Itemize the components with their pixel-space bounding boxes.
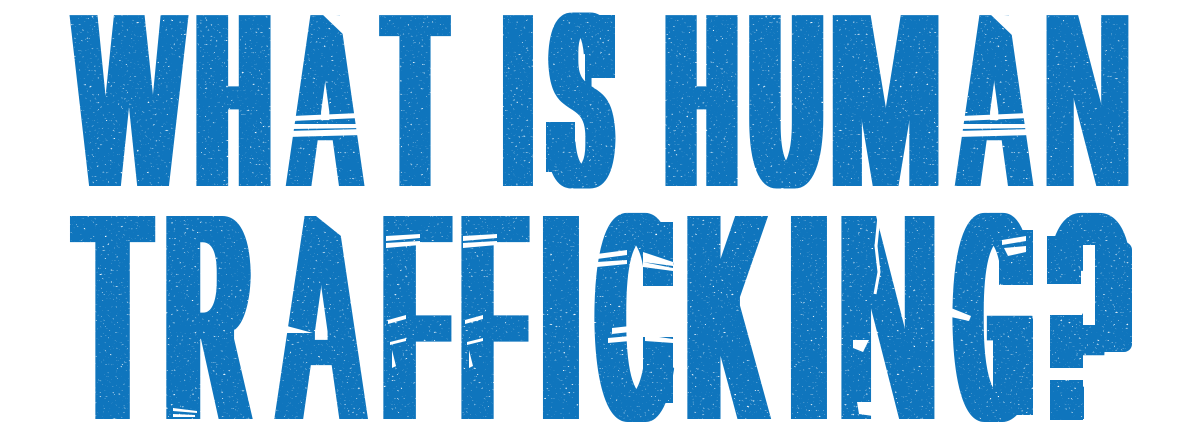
heading line 2: TRAFFICKING?	[78, 145, 1129, 441]
heading line 1: WHAT IS HUMAN	[74, 0, 1130, 246]
